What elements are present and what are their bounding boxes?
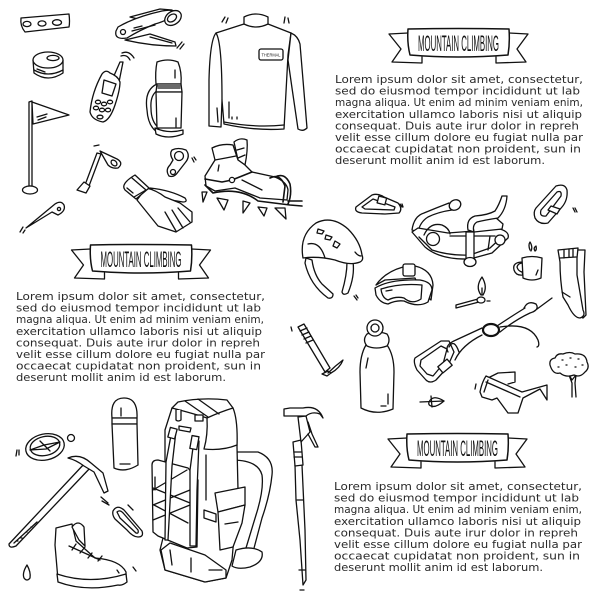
icon: strap plate bbox=[21, 14, 69, 32]
text block 1: velit esse cillum dolore eu fugiat nulla par bbox=[335, 132, 584, 144]
text block 3: deserunt mollit anim id est laborum. bbox=[334, 562, 543, 574]
text block 3: magna aliqua. Ut enim ad minim veniam enim, bbox=[334, 504, 582, 516]
icon: ice screw bbox=[291, 324, 343, 376]
icon: tin can bbox=[33, 52, 63, 78]
text block 1: sed do eiusmod tempor incididunt ut lab bbox=[335, 86, 580, 98]
text block 2: sed do eiusmod tempor incididunt ut lab bbox=[16, 303, 261, 315]
icon: ski goggles bbox=[375, 264, 433, 305]
icon: climbing harness bbox=[412, 196, 508, 266]
text block 1: magna aliqua. Ut enim ad minim veniam enim, bbox=[335, 97, 583, 109]
icon: ice axe bbox=[9, 456, 109, 547]
text block 2: Lorem ipsum dolor sit amet, consectetur, bbox=[16, 291, 265, 303]
text block 1: consequat. Duis aute irur dolor in repreh bbox=[335, 120, 579, 132]
text block 3: occaecat cupidatat non proident, sun in bbox=[334, 551, 580, 563]
icon: safety glasses bbox=[475, 372, 547, 413]
text block 2: occaecat cupidatat non proident, sun in bbox=[16, 361, 261, 373]
icon: small thermos bbox=[112, 398, 138, 470]
ribbon heading 2 bbox=[72, 244, 210, 279]
icon: flag bbox=[22, 101, 69, 194]
ribbon heading 3 bbox=[388, 434, 527, 468]
text block 3: velit esse cillum dolore eu fugiat nulla par bbox=[334, 539, 583, 551]
icon: pick with sling bbox=[77, 145, 121, 193]
icon: thermal long sleeve shirt: THERMAL bbox=[262, 52, 281, 58]
ribbon heading 1 bbox=[389, 28, 528, 63]
icon: coffee mug bbox=[514, 242, 542, 280]
text block 1: exercitation ullamco laboris nisi ut aliquip bbox=[335, 109, 582, 121]
icon: glove bbox=[124, 175, 192, 232]
icon: oval carabiner right bbox=[534, 185, 577, 223]
text block 2: magna aliqua. Ut enim ad minim veniam enim, bbox=[16, 314, 264, 326]
icon: thermos flask with handle bbox=[146, 60, 183, 137]
text block 2: consequat. Duis aute irur dolor in repreh bbox=[16, 337, 260, 349]
infographic canvas: MOUNTAIN CLIMBING bbox=[100, 247, 182, 272]
icon: large backpack bbox=[152, 399, 272, 582]
icon: helmet with straps bbox=[302, 220, 363, 300]
icon: hiking boot bbox=[23, 523, 136, 588]
icon: small carabiner bbox=[113, 505, 142, 537]
icon: tree bbox=[550, 352, 588, 397]
icon: thermal long sleeve shirt bbox=[209, 14, 307, 130]
icon: figure eight descender bbox=[167, 148, 196, 176]
text block 2: exercitation ullamco laboris nisi ut aliquip bbox=[16, 326, 262, 338]
text block 3: consequat. Duis aute irur dolor in repreh bbox=[334, 527, 578, 539]
text block 1: occaecat cupidatat non proident, sun in bbox=[335, 144, 581, 156]
text block 3: Lorem ipsum dolor sit amet, consectetur, bbox=[334, 481, 582, 493]
icon: compass bbox=[16, 430, 74, 464]
text block 3: sed do eiusmod tempor incididunt ut lab bbox=[334, 493, 579, 505]
text block 1: deserunt mollit anim id est laborum. bbox=[335, 155, 545, 167]
text block 1: Lorem ipsum dolor sit amet, consectetur, bbox=[335, 74, 583, 86]
text block 2: velit esse cillum dolore eu fugiat nulla par bbox=[16, 349, 266, 361]
icon: burning match bbox=[456, 277, 490, 308]
text block 2: deserunt mollit anim id est laborum. bbox=[16, 372, 226, 384]
icon: socks bbox=[558, 248, 586, 318]
icon: trekking pole bbox=[284, 407, 323, 590]
icon: carabiner top bbox=[356, 194, 403, 214]
text block 3: exercitation ullamco laboris nisi ut aliquip bbox=[334, 516, 581, 528]
icon: pocket knife bbox=[116, 8, 184, 49]
icon: boot with crampons bbox=[202, 139, 302, 219]
icon: rope with carabiner bbox=[414, 298, 552, 382]
icon: leaf bbox=[420, 396, 444, 407]
icon: piton bbox=[20, 202, 64, 233]
icon: walkie talkie phone bbox=[90, 52, 134, 122]
icon: water bottle bbox=[360, 320, 394, 412]
